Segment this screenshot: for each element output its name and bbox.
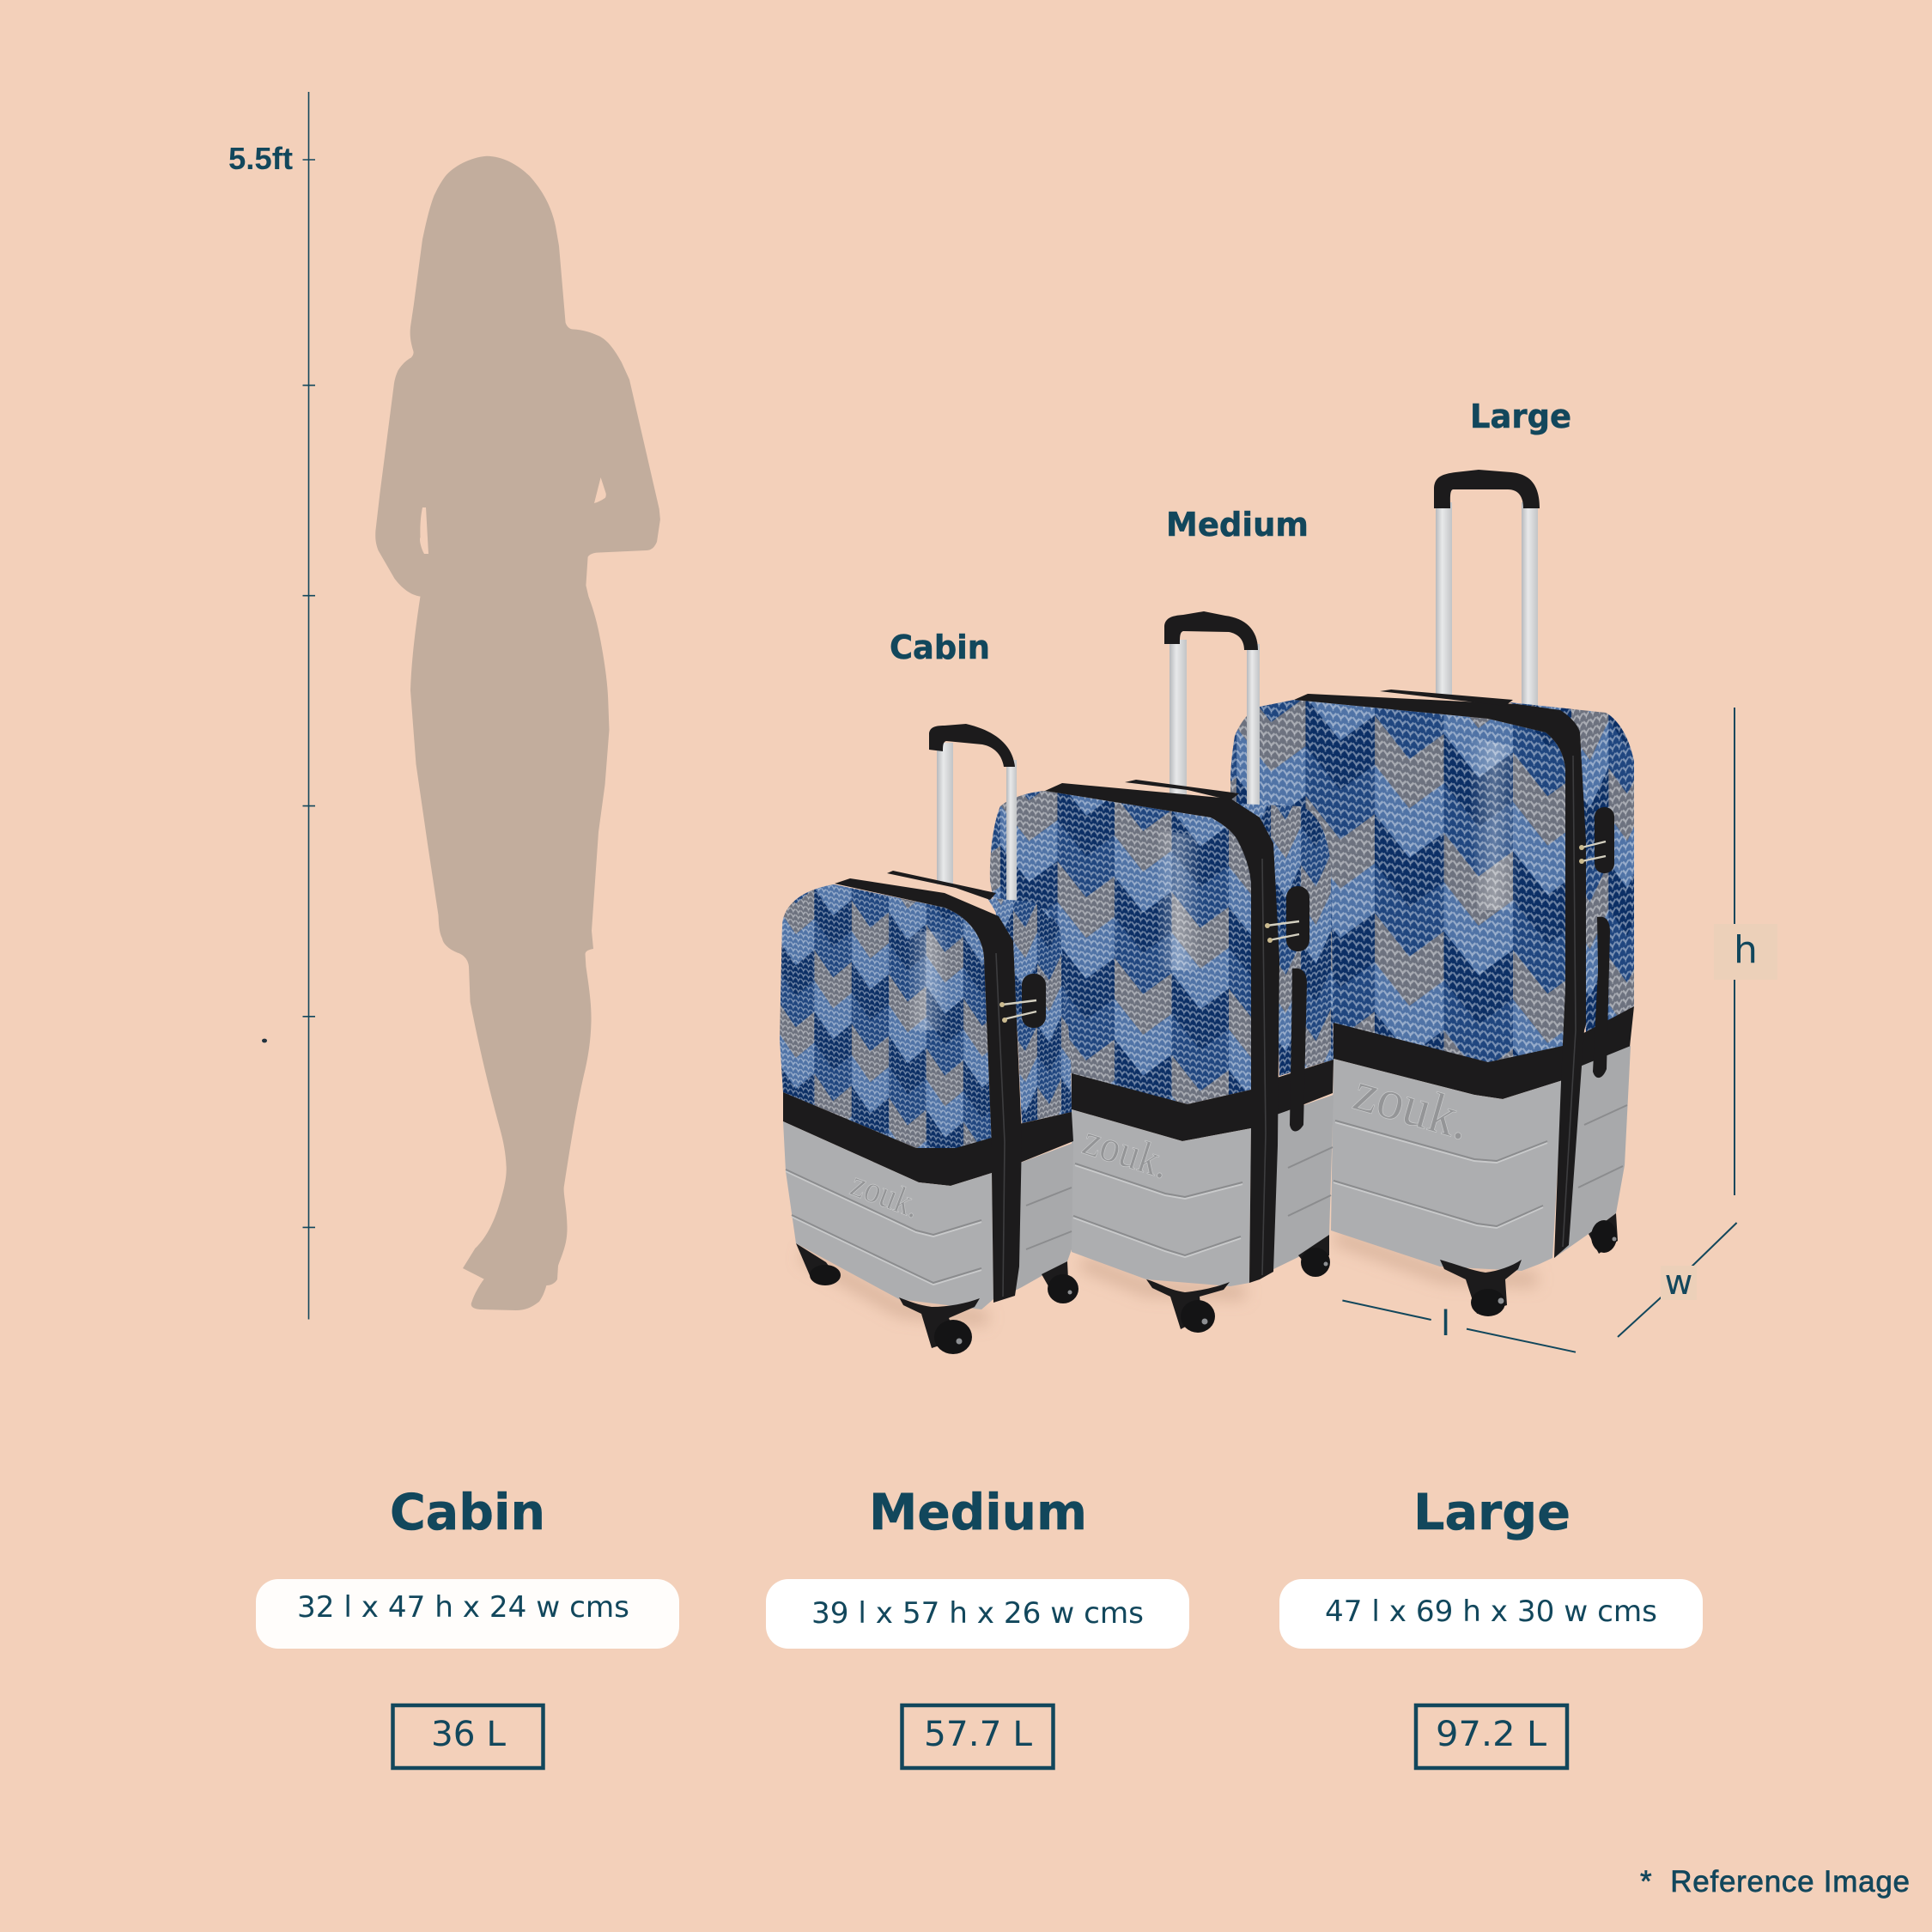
cabin volume box	[393, 1705, 543, 1768]
large heading: Large	[1413, 1483, 1571, 1541]
medium heading: Medium	[869, 1483, 1087, 1541]
large: zip seam and top handle	[1294, 690, 1586, 1258]
medium: front face	[990, 791, 1251, 1286]
cabin: front face	[780, 884, 993, 1309]
dimension: width: w	[1665, 1263, 1692, 1303]
large dimensions pill	[1279, 1579, 1703, 1649]
column: medium	[766, 1483, 1189, 1768]
medium volume box: 57.7 L	[924, 1715, 1033, 1754]
large: wheels	[1440, 1213, 1618, 1316]
cabin heading: Cabin	[390, 1483, 545, 1541]
medium dimensions pill	[766, 1579, 1189, 1649]
cabin: wheels	[796, 1243, 1078, 1354]
medium volume box	[902, 1705, 1053, 1768]
cabin: combination lock	[999, 974, 1046, 1028]
cabin: side face	[987, 898, 1073, 1292]
dimension: width	[1618, 1223, 1737, 1337]
medium: zouk logo: zouk.	[1077, 1115, 1176, 1188]
column: large	[1279, 1483, 1703, 1768]
height ruler	[302, 92, 315, 1319]
label: Medium: Medium	[1166, 506, 1309, 544]
cabin dimensions pill: 32 l x 47 h x 24 w cms	[297, 1590, 629, 1625]
suitcase: large	[1230, 470, 1634, 1316]
dimension: length: l	[1441, 1304, 1450, 1344]
cabin volume box: 36 L	[431, 1715, 507, 1754]
footnote: reference image: * Reference Image	[1640, 1865, 1910, 1899]
suitcase shadows	[803, 1236, 1537, 1318]
medium dimensions pill: 39 l x 57 h x 26 w cms	[811, 1596, 1144, 1631]
dimension: length	[1342, 1300, 1576, 1352]
cabin: zip seam and top handle	[835, 871, 1022, 1303]
column: cabin	[256, 1483, 679, 1768]
large: zouk logo: zouk.	[1347, 1060, 1478, 1152]
medium: combination lock and side handle	[1265, 886, 1309, 1132]
large: front face	[1230, 700, 1567, 1271]
ruler label: 5.5ft: 5.5ft	[228, 141, 293, 176]
large volume box: 97.2 L	[1436, 1715, 1547, 1754]
label: Cabin: Cabin	[890, 629, 990, 666]
large: combination lock and side handle	[1579, 807, 1614, 1078]
medium: telescopic handle	[1164, 611, 1260, 807]
dimension: height: h	[1734, 928, 1758, 972]
dimension: height	[1714, 708, 1777, 1195]
suitcase: medium	[990, 611, 1334, 1333]
label: Large: Large	[1470, 398, 1571, 435]
cabin: zouk logo: zouk.	[845, 1162, 926, 1226]
stray dot	[262, 1039, 267, 1042]
cabin dimensions pill	[256, 1579, 679, 1649]
suitcase: cabin	[780, 724, 1078, 1354]
medium: wheels	[1146, 1235, 1330, 1333]
cabin: telescopic handle	[929, 724, 1017, 902]
large dimensions pill: 47 l x 69 h x 30 w cms	[1325, 1595, 1657, 1629]
large volume box	[1416, 1705, 1567, 1768]
large: telescopic handle	[1434, 470, 1540, 713]
medium: zip seam and top handle	[1045, 780, 1279, 1283]
large: side face	[1510, 702, 1634, 1258]
human silhouette	[375, 156, 660, 1310]
medium: side face	[1236, 804, 1334, 1273]
